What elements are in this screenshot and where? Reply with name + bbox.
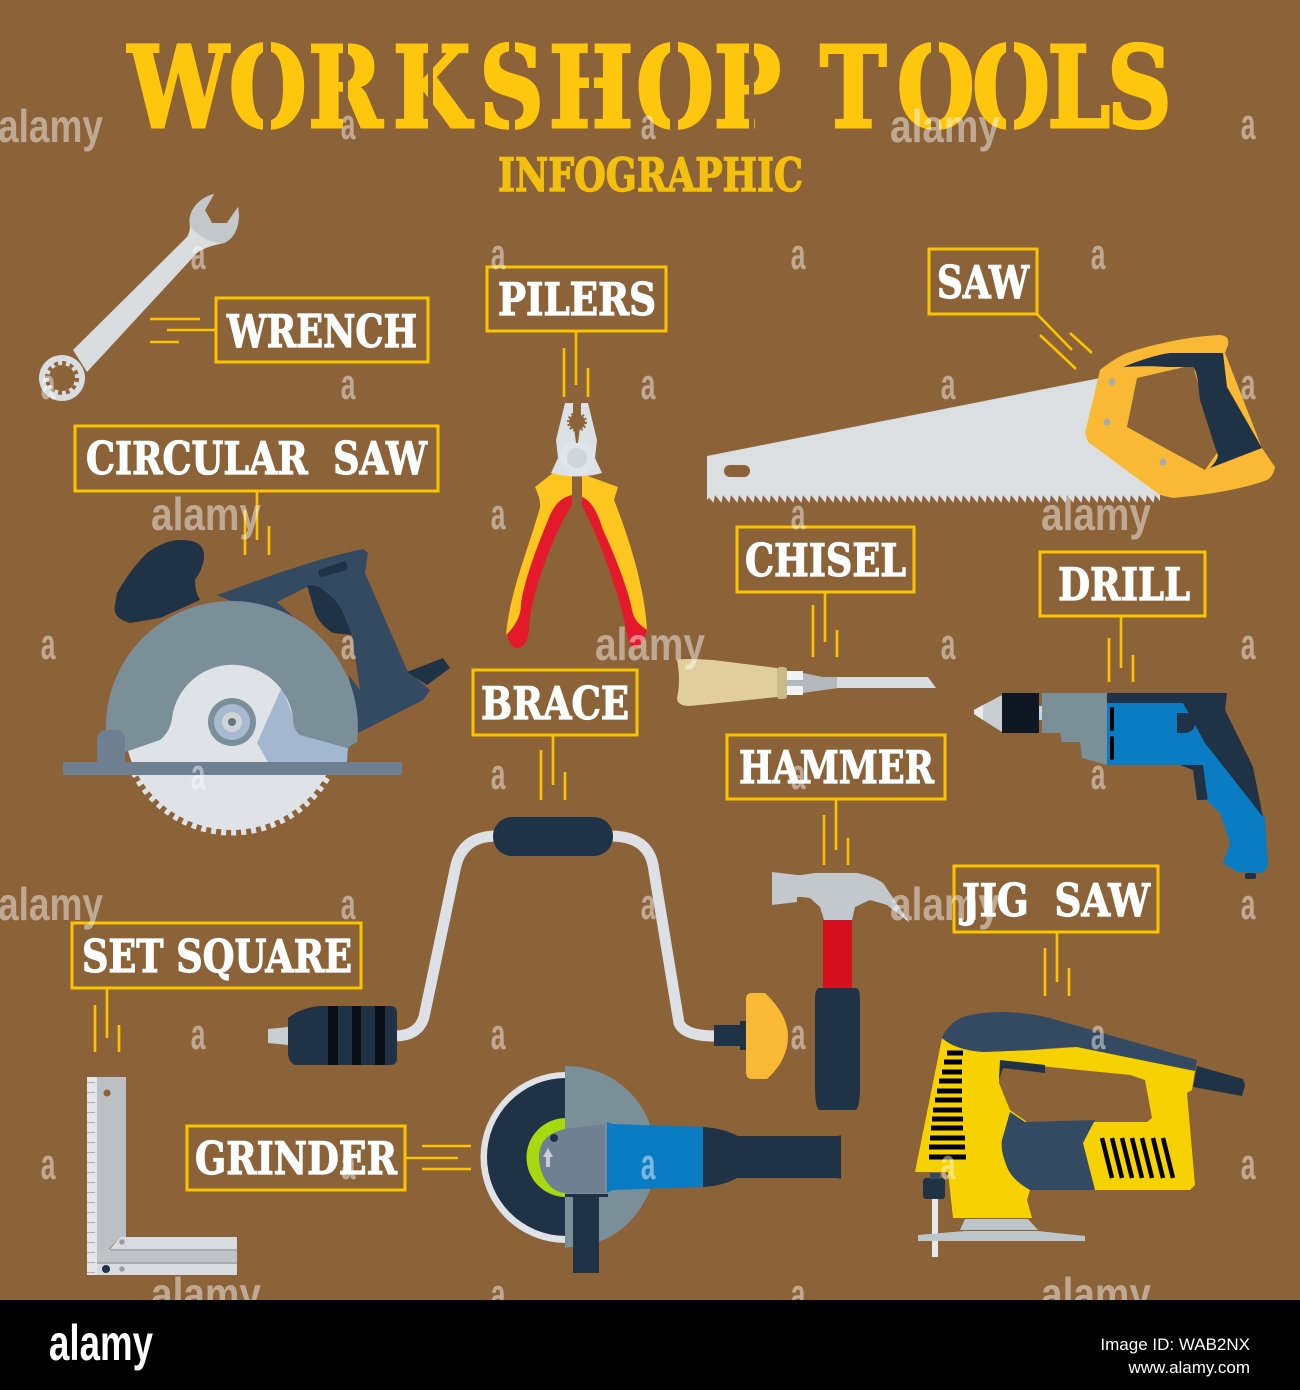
icon: wrench xyxy=(39,194,239,401)
icon: pliers xyxy=(506,402,647,648)
icon: jig saw xyxy=(915,1012,1245,1257)
label: jig saw: JIG SAW xyxy=(959,874,1151,927)
watermarks: a xyxy=(641,1139,656,1189)
watermarks: a xyxy=(641,99,656,149)
icon: circular saw xyxy=(63,540,450,832)
label: hammer xyxy=(727,735,945,865)
watermarks: a xyxy=(341,99,356,149)
watermarks: a xyxy=(341,1139,356,1189)
icon: brace xyxy=(268,817,788,1079)
watermarks: a xyxy=(491,489,506,539)
label: hammer: HAMMER xyxy=(739,741,934,794)
label: circular saw: CIRCULAR SAW xyxy=(86,432,428,485)
label: set square xyxy=(72,923,361,1052)
watermarks: a xyxy=(1241,1139,1256,1189)
watermarks: a xyxy=(491,1269,506,1319)
label: grinder: GRINDER xyxy=(195,1132,397,1185)
watermarks: a xyxy=(941,1139,956,1189)
watermarks: a xyxy=(791,749,806,799)
footer bar: alamy xyxy=(49,1315,153,1371)
subtitle: INFOGRAPHIC xyxy=(498,148,803,202)
watermarks: a xyxy=(341,359,356,409)
watermarks: a xyxy=(191,749,206,799)
watermarks: a xyxy=(791,229,806,279)
label: brace: BRACE xyxy=(481,677,629,730)
label: brace xyxy=(473,670,637,800)
label: drill xyxy=(1040,552,1205,682)
watermarks: a xyxy=(491,749,506,799)
title: WORKSHOP TOOLS xyxy=(127,22,1172,154)
icon: hammer xyxy=(772,872,910,1110)
label: chisel xyxy=(737,527,914,657)
watermarks: a xyxy=(941,359,956,409)
label: chisel: CHISEL xyxy=(745,534,906,587)
label: saw: SAW xyxy=(937,256,1030,309)
watermarks: a xyxy=(491,1009,506,1059)
label: saw xyxy=(929,249,1092,369)
footer bar: www.alamy.com xyxy=(1127,1358,1250,1377)
watermarks: a xyxy=(791,1269,806,1319)
label: wrench xyxy=(150,298,428,362)
icon: drill xyxy=(974,693,1268,879)
watermarks: a xyxy=(41,359,56,409)
watermarks: alamy xyxy=(0,100,103,152)
watermarks: a xyxy=(1091,229,1106,279)
watermarks: a xyxy=(1091,749,1106,799)
watermarks: a xyxy=(941,619,956,669)
watermarks: a xyxy=(1241,619,1256,669)
label: pliers xyxy=(487,267,666,397)
watermarks: a xyxy=(1241,359,1256,409)
watermarks: a xyxy=(491,229,506,279)
label: pliers: PILERS xyxy=(498,273,656,326)
footer bar: Image ID: WAB2NX xyxy=(1100,1335,1250,1354)
watermarks: alamy xyxy=(890,878,1000,930)
watermarks: alamy xyxy=(151,1268,261,1320)
watermarks: a xyxy=(191,229,206,279)
icon: grinder xyxy=(480,1066,841,1273)
watermarks: alamy xyxy=(1041,488,1151,540)
watermarks: a xyxy=(1241,879,1256,929)
watermarks: a xyxy=(1091,1009,1106,1059)
icon: set square xyxy=(87,1077,237,1275)
icon: hand saw xyxy=(707,335,1275,503)
watermarks: a xyxy=(191,1009,206,1059)
watermarks: a xyxy=(641,879,656,929)
label: jig saw xyxy=(954,866,1158,996)
label: set square: SET SQUARE xyxy=(82,930,352,983)
label: drill: DRILL xyxy=(1058,558,1190,611)
icon: chisel xyxy=(677,659,936,706)
watermarks: a xyxy=(341,619,356,669)
watermarks: alamy xyxy=(0,878,103,930)
watermarks: alamy xyxy=(1041,1268,1151,1320)
watermarks: alamy xyxy=(151,488,261,540)
footer bar xyxy=(0,1300,1300,1390)
watermarks: a xyxy=(791,1009,806,1059)
watermarks: a xyxy=(1241,99,1256,149)
watermarks: a xyxy=(41,1139,56,1189)
label: circular saw xyxy=(75,426,438,555)
watermarks: a xyxy=(41,619,56,669)
watermarks: alamy xyxy=(595,618,705,670)
watermarks: alamy xyxy=(890,100,1000,152)
watermarks: a xyxy=(341,879,356,929)
label: wrench: WRENCH xyxy=(226,305,417,358)
watermarks: a xyxy=(791,489,806,539)
watermarks: a xyxy=(641,359,656,409)
